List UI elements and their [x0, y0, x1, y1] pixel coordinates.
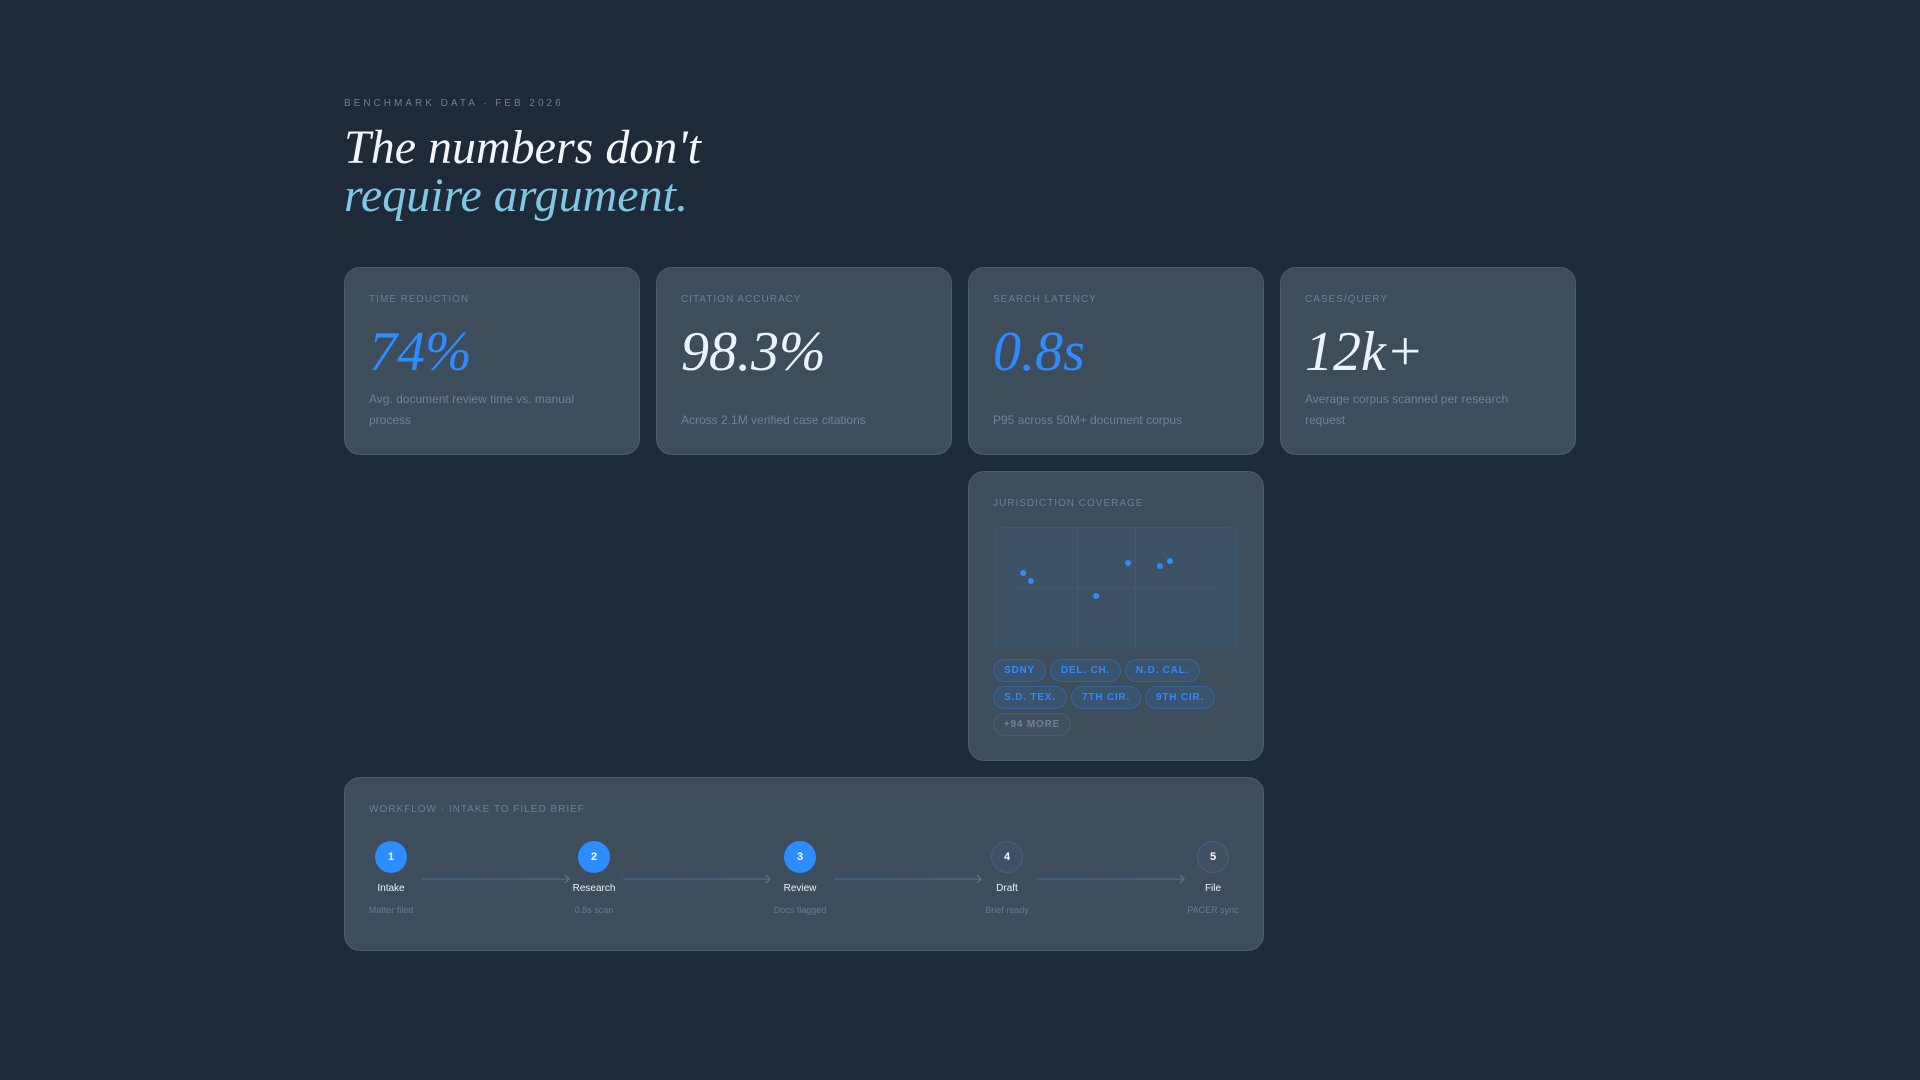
stat: 74%: 74%	[369, 321, 472, 383]
step 4: draft	[985, 841, 1029, 915]
panel: workflow: File	[1205, 883, 1221, 894]
chip: SDNY: SDNY	[1004, 665, 1035, 676]
step 5: file	[1187, 841, 1239, 915]
panel: cases per query	[1280, 267, 1576, 455]
label: jurisdiction coverage: JURISDICTION COVERAGE	[993, 498, 1143, 509]
chip: N.D. Cal.: N.D. CAL.	[1136, 665, 1189, 676]
chip: 7th Cir.	[1071, 686, 1141, 709]
panel: workflow: 3	[797, 851, 803, 863]
chip: 9th Cir.	[1145, 686, 1215, 709]
step 1: intake	[369, 841, 413, 915]
arrow 1	[422, 874, 570, 884]
panel: workflow: 5	[1210, 851, 1216, 863]
panel: workflow: Docs flagged	[774, 905, 826, 915]
map: jurisdiction dots	[993, 527, 1239, 648]
panel: workflow: Review	[784, 883, 816, 894]
label: search latency: SEARCH LATENCY	[993, 294, 1097, 305]
label: citation accuracy: CITATION ACCURACY	[681, 294, 802, 305]
panel: workflow	[344, 777, 1264, 951]
label: cases per query: CASES/QUERY	[1305, 294, 1388, 305]
panel: citation accuracy	[656, 267, 952, 455]
panel: workflow: Intake	[377, 883, 405, 894]
step 3: review	[774, 841, 826, 915]
chip: 7th Cir.: 7TH CIR.	[1082, 692, 1130, 703]
panel: workflow: 0.8s scan	[575, 905, 613, 915]
chip: 9th Cir.: 9TH CIR.	[1156, 692, 1204, 703]
chip: +94 more	[993, 713, 1071, 736]
chip: SDNY	[993, 659, 1046, 682]
panel: workflow: Research	[573, 883, 615, 894]
label: workflow: WORKFLOW · INTAKE TO FILED BRIEF	[369, 804, 585, 815]
stat: 98.3%: 98.3%	[681, 321, 826, 383]
eyebrow: benchmark data: BENCHMARK DATA · FEB 2026	[344, 98, 564, 109]
title: require argument.	[344, 169, 688, 222]
panel: workflow: Brief ready	[985, 905, 1029, 915]
chip: Del. Ch.: DEL. CH.	[1061, 665, 1110, 676]
title	[344, 121, 702, 222]
chip: S.D. Tex.	[993, 686, 1067, 709]
panel: workflow: 2	[591, 851, 597, 863]
description: Across 2.1M verified case citations	[681, 413, 866, 427]
description: P95 across 50M+ document corpus	[993, 413, 1182, 427]
panel: search latency	[968, 267, 1264, 455]
arrow 2	[623, 874, 771, 884]
title: The numbers don't	[344, 121, 701, 174]
description: Average corpus scanned per research request	[1305, 392, 1508, 427]
panel: time reduction	[344, 267, 640, 455]
panel: workflow: Matter filed	[369, 905, 413, 915]
stat: 12k+: 12k+	[1305, 321, 1424, 383]
chip: +94 more: +94 MORE	[1004, 719, 1060, 730]
panel: workflow: 1	[388, 851, 394, 863]
step 2: research	[573, 841, 615, 915]
chip: S.D. Tex.: S.D. TEX.	[1004, 692, 1056, 703]
stat: 0.8s: 0.8s	[993, 321, 1085, 383]
label: time reduction: TIME REDUCTION	[369, 294, 469, 305]
arrow 4	[1037, 874, 1185, 884]
arrow 3	[834, 874, 982, 884]
panel: workflow: 4	[1004, 851, 1010, 863]
chip: Del. Ch.	[1050, 659, 1121, 682]
panel: workflow: PACER sync	[1187, 905, 1239, 915]
chip: N.D. Cal.	[1125, 659, 1200, 682]
panel: workflow: Draft	[996, 883, 1018, 894]
description: Avg. document review time vs. manual process	[369, 392, 574, 427]
panel: jurisdiction coverage	[968, 471, 1264, 761]
